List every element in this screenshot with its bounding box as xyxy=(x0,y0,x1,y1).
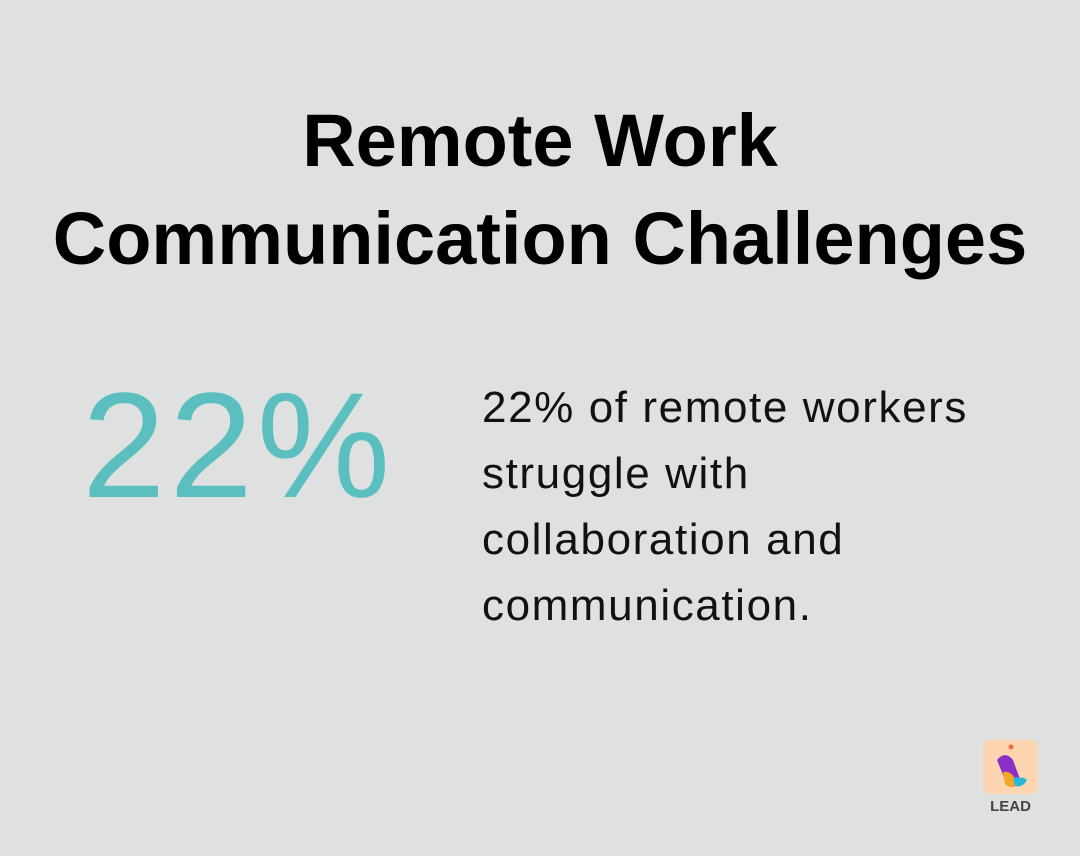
description text: struggle with xyxy=(482,449,750,498)
description text: collaboration and xyxy=(482,515,844,564)
description text: 22% of remote workers xyxy=(482,383,968,432)
description text xyxy=(482,383,968,630)
title xyxy=(53,99,1027,280)
title: Communication Challenges xyxy=(53,197,1027,280)
title: Remote Work xyxy=(302,99,778,182)
big stat: 22% xyxy=(82,361,394,529)
description text: communication. xyxy=(482,581,813,630)
logo xyxy=(983,740,1038,815)
logo: LEAD xyxy=(990,798,1031,815)
